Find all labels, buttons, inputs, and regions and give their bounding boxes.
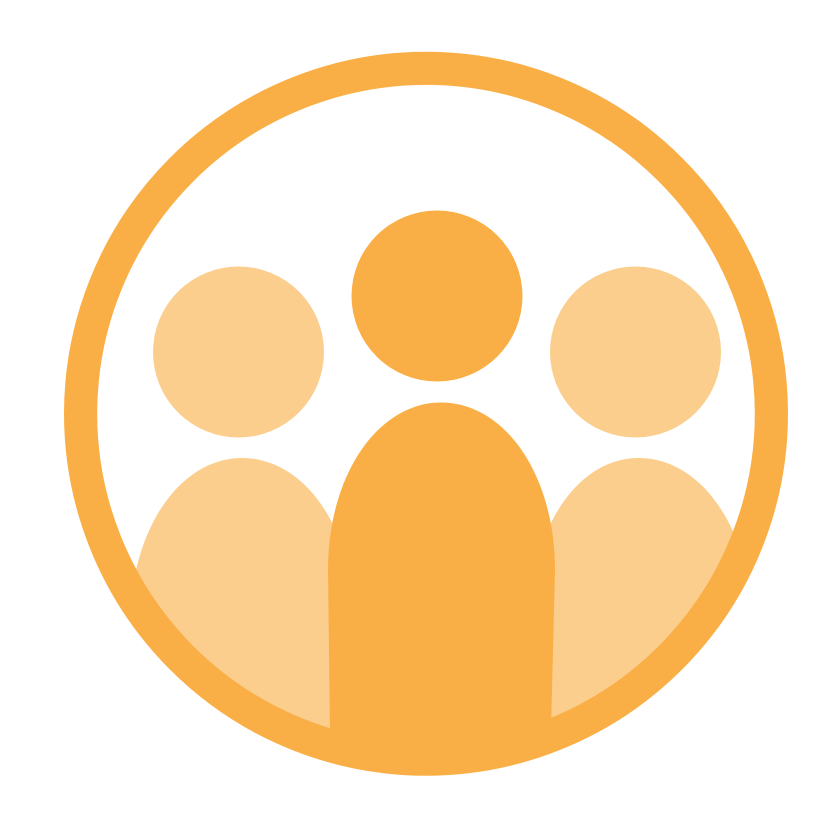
ring: circle outline [81,68,771,759]
person: center, dark [328,210,555,765]
person: left, light [136,266,332,728]
icon: group of three people in a circle [64,52,788,776]
person: right, light [550,266,733,718]
